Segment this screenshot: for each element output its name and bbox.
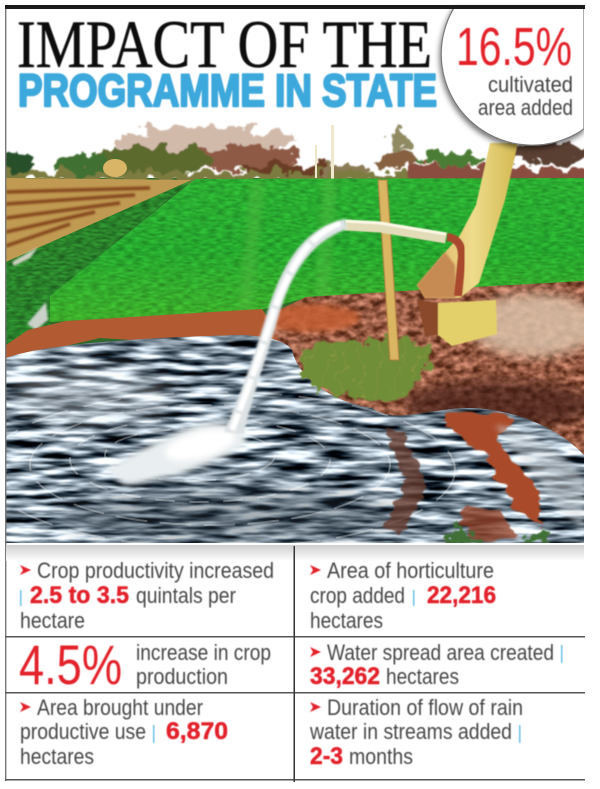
cell: crop productivity: Crop productivity increased: [37, 558, 274, 583]
cell: rain water flow: Duration of flow of rain: [327, 695, 523, 720]
callout caption: [478, 72, 573, 120]
cell: crop production: increase in crop: [136, 640, 271, 665]
red reflection of the bank: [385, 410, 540, 543]
heading line two: PROGRAMME IN STATE: [18, 65, 437, 116]
cell: productive use: Area brought under: [37, 695, 203, 720]
bright reflection patch: [495, 425, 584, 530]
rust stained hose base: [417, 252, 456, 298]
cell: horticulture: hectares: [310, 608, 383, 633]
cell: rain water flow: [309, 695, 523, 770]
cell: crop productivity: hectare: [20, 608, 85, 633]
arc of water pouring from the pipe: [224, 219, 347, 434]
grass tuft: [302, 339, 432, 405]
left frame rule: [5, 8, 6, 781]
cell: water spread: hectares: [386, 664, 459, 689]
callout circle: 16.5% cultivated area added: [441, 0, 600, 160]
ripples: [0, 392, 455, 548]
tree line on the horizon: [0, 125, 592, 190]
bottom vegetation: [445, 522, 556, 543]
cell: productive use: productive use: [20, 719, 146, 744]
cell: productive use: 6,870: [166, 718, 228, 745]
cell: horticulture: 22,216: [427, 582, 496, 609]
cell: rain water flow: months: [349, 744, 413, 769]
cell: water spread: Water spread area created: [327, 640, 554, 665]
cell: productive use: hectares: [20, 744, 94, 769]
cell: water spread: 33,262: [310, 663, 380, 690]
callout caption: area added: [478, 95, 573, 120]
cell: productive use: [20, 695, 228, 769]
vertical support post: [378, 180, 399, 360]
cell: rain water flow: 2-3: [310, 743, 343, 770]
cell: crop production: 4.5%: [19, 633, 122, 696]
statistics table: [5, 545, 585, 782]
heading line one: IMPACT OF THE: [17, 6, 432, 82]
dark green strip beside the field: [6, 180, 192, 344]
cell: horticulture: crop added: [310, 583, 405, 608]
tan ploughed field: [6, 178, 192, 262]
cell: crop production: [19, 633, 271, 696]
callout caption: cultivated: [488, 72, 573, 97]
large canvas hose: [417, 143, 518, 298]
cell: crop productivity: 2.5 to 3.5: [30, 582, 129, 609]
top black rule: [5, 5, 585, 9]
earth bank and right-hand ground: [6, 281, 584, 455]
cell: water spread: [310, 640, 562, 690]
small inlet stream: [27, 302, 48, 330]
small runoff channel: [12, 247, 38, 266]
cell: crop production: production: [136, 664, 228, 689]
cell: rain water flow: water in streams added: [309, 719, 512, 744]
photo: irrigation pump filling a pond beside a rice field: [0, 118, 600, 550]
cell: horticulture: Area of horticulture: [327, 558, 494, 583]
horizontal white pipe and rusty elbow: [345, 221, 462, 296]
cell: crop productivity: quintals per: [136, 583, 236, 608]
cell: crop productivity: [20, 558, 274, 633]
concrete block: [417, 300, 497, 346]
green rice field: [50, 178, 584, 322]
cell: horticulture: [310, 558, 496, 633]
pond water: [0, 330, 600, 550]
white foam where the water lands: [105, 422, 246, 485]
